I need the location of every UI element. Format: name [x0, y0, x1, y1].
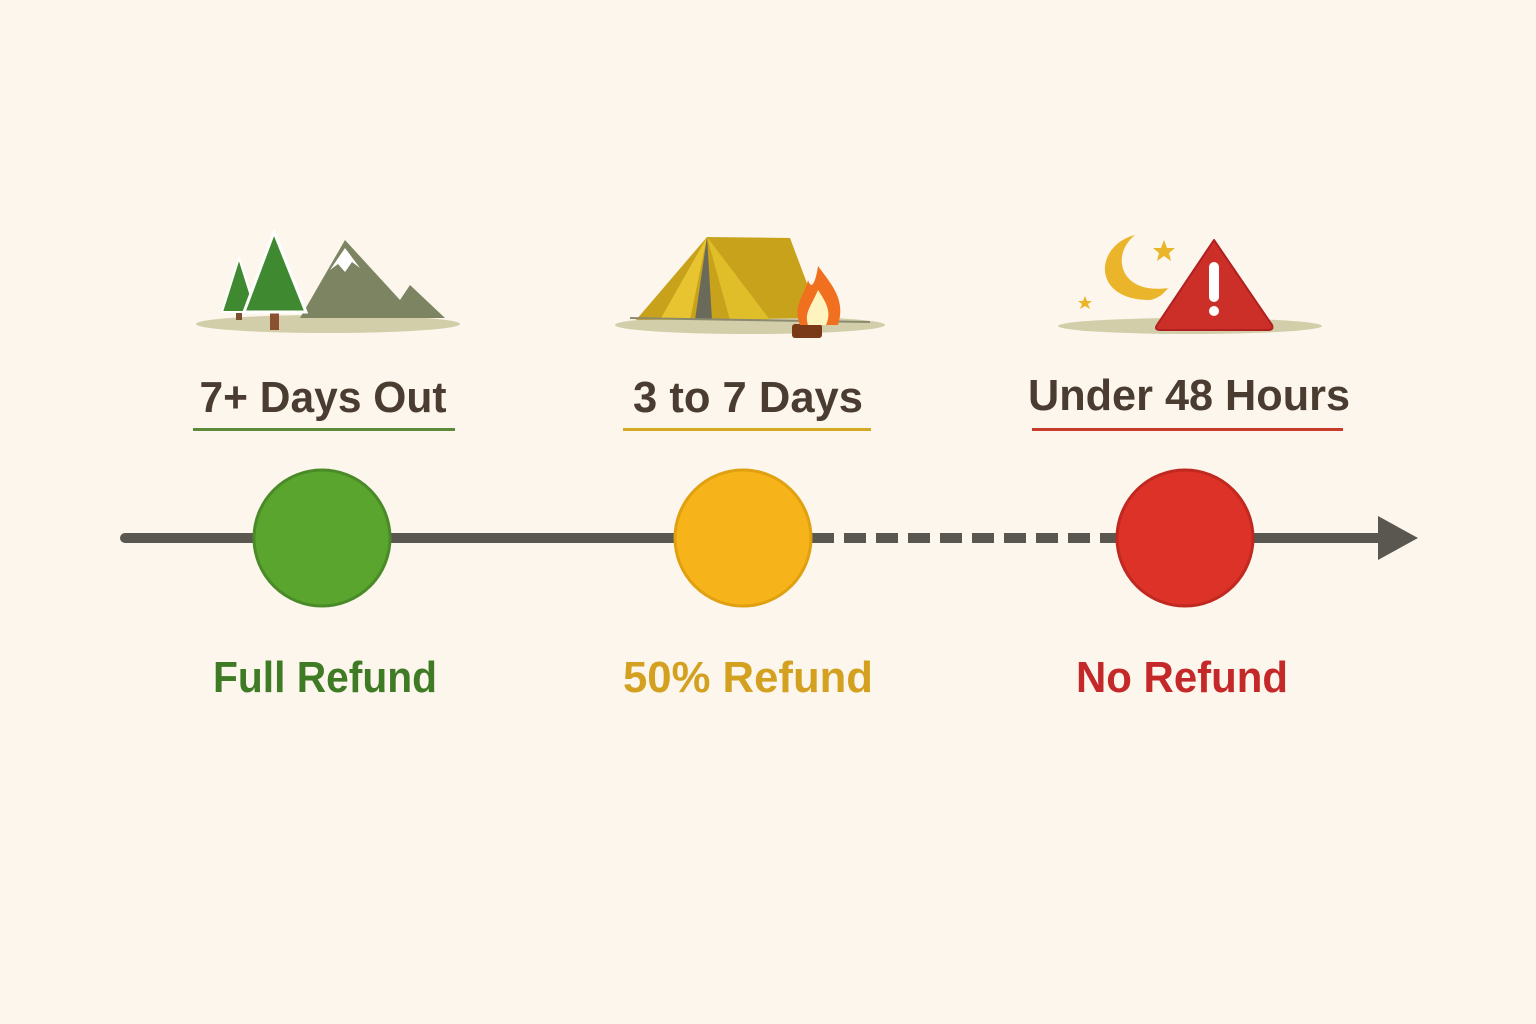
marker: red circle — [1117, 470, 1253, 606]
label: 50% Refund: 50% Refund — [623, 653, 873, 702]
marker: green circle — [254, 470, 390, 606]
icon: trees and mountains — [196, 232, 460, 333]
icon: tent and campfire — [615, 237, 885, 338]
label: Full Refund: Full Refund — [213, 653, 437, 702]
marker: yellow circle — [675, 470, 811, 606]
icon: moon, stars and warning — [1058, 235, 1322, 334]
heading: 7+ Days Out: 7+ Days Out — [200, 373, 447, 422]
heading: Under 48 Hours: Under 48 Hours — [1028, 371, 1350, 420]
timeline arrow — [125, 516, 1418, 560]
label: No Refund: No Refund — [1076, 653, 1288, 702]
heading: 3 to 7 Days: 3 to 7 Days — [633, 373, 863, 422]
